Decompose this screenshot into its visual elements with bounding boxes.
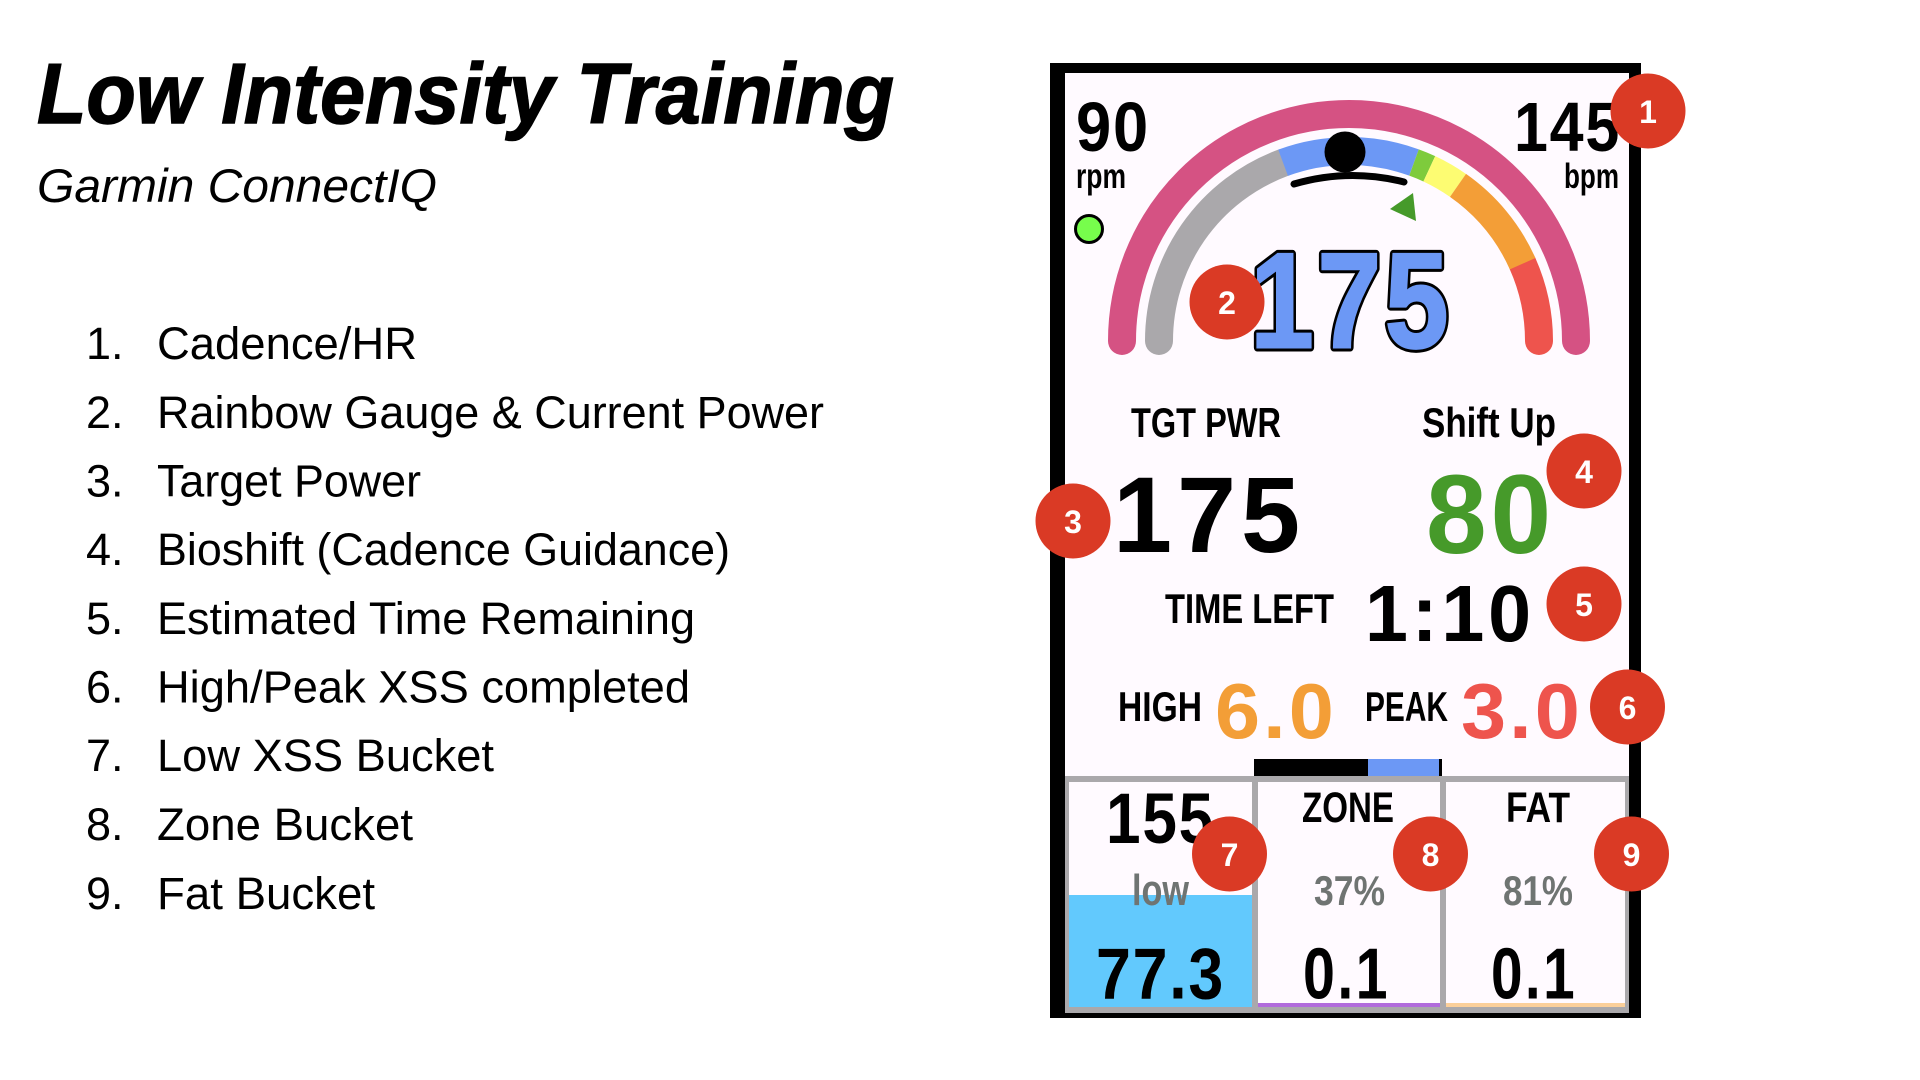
low bucket top value: 155 [1106,780,1215,859]
callout badge 7: 7 [1221,837,1238,873]
time left value: 1:10 [1365,569,1535,658]
callout badge 6: 6 [1619,690,1636,726]
callout badge 1 [1610,74,1686,148]
fat bucket bar [1446,1003,1625,1007]
bucket grid [1065,776,1629,1014]
high value: 6.0 [1215,667,1337,755]
gauge needle icon [1294,132,1404,184]
zone label: ZONE [1302,784,1394,832]
callout badge 4 [1546,434,1622,508]
list item 6: 6. [86,662,124,712]
time left label: TIME LEFT [1165,585,1334,632]
heart rate value: 145 [1514,88,1621,166]
list item 3: Target Power [157,456,421,506]
list item 7: Low XSS Bucket [157,730,494,781]
peak value: 3.0 [1461,667,1583,755]
list item 9: Fat Bucket [157,868,376,919]
subtitle: Garmin ConnectIQ [37,159,437,212]
zone bucket value: 0.1 [1303,934,1390,1014]
numbered legend list [86,318,824,919]
low bucket fill [1069,895,1252,1007]
progress bar [1254,759,1442,776]
callout badge 3: 3 [1064,504,1082,540]
peak label: PEAK [1365,683,1448,730]
callout badge 8: 8 [1422,837,1439,873]
power value outline: 175 [1250,224,1452,376]
list item 8: Zone Bucket [157,799,413,850]
cadence value: 90 [1076,88,1150,166]
panel: device screen [1050,63,1641,1018]
callout badge 4: 4 [1575,454,1593,490]
fat bucket value: 0.1 [1491,934,1577,1014]
fat label: FAT [1506,784,1570,832]
rainbow power gauge [1159,151,1539,341]
callout badge 7 [1192,816,1267,892]
list item 8: 8. [86,799,124,850]
list item 3: 3. [86,456,124,506]
target power label: TGT PWR [1131,399,1281,446]
callout badge 5 [1546,566,1622,642]
list item 4: Bioshift (Cadence Guidance) [157,524,730,575]
list item 9: 9. [86,868,124,919]
zone bucket bar [1258,1003,1440,1007]
callout badge 5: 5 [1575,587,1593,623]
list item 4: 4. [86,524,124,575]
heart rate unit: bpm [1564,157,1619,196]
outer pink gauge arc [1122,114,1576,341]
low label: low [1132,866,1190,915]
list item 5: 5. [86,593,124,644]
callout badge 9 [1594,816,1669,892]
cadence guidance value: 80 [1426,452,1555,577]
callout badge 8 [1393,816,1468,892]
fat percent: 81% [1503,867,1573,914]
list item 1: Cadence/HR [157,318,417,369]
low bucket value: 77.3 [1096,934,1225,1014]
title: Low Intensity Training [37,47,894,142]
cadence unit: rpm [1076,157,1126,196]
list item 7: 7. [86,730,124,781]
device frame [1050,63,1641,1018]
target marker triangle [1390,193,1416,221]
callout badge 9: 9 [1623,837,1640,873]
power value fill: 175 [1250,224,1452,376]
callout badge 2: 2 [1218,285,1236,321]
list item 6: High/Peak XSS completed [157,662,690,712]
zone percent: 37% [1314,867,1385,914]
list item 2: 2. [86,387,124,438]
device background [1065,73,1629,1013]
list item 1: 1. [86,318,124,369]
grid lines [1065,776,1629,1013]
list item 5: Estimated Time Remaining [157,593,695,644]
callout badge 2 [1190,264,1264,340]
callout badge 3 [1036,484,1110,558]
high label: HIGH [1118,683,1202,730]
shift label: Shift Up [1422,399,1556,446]
status dot [1076,216,1102,242]
list item 2: Rainbow Gauge & Current Power [157,387,824,438]
target power value: 175 [1113,454,1305,575]
callout badge 6 [1590,670,1665,744]
callout badge 1: 1 [1639,94,1657,130]
current power value [1250,224,1452,376]
